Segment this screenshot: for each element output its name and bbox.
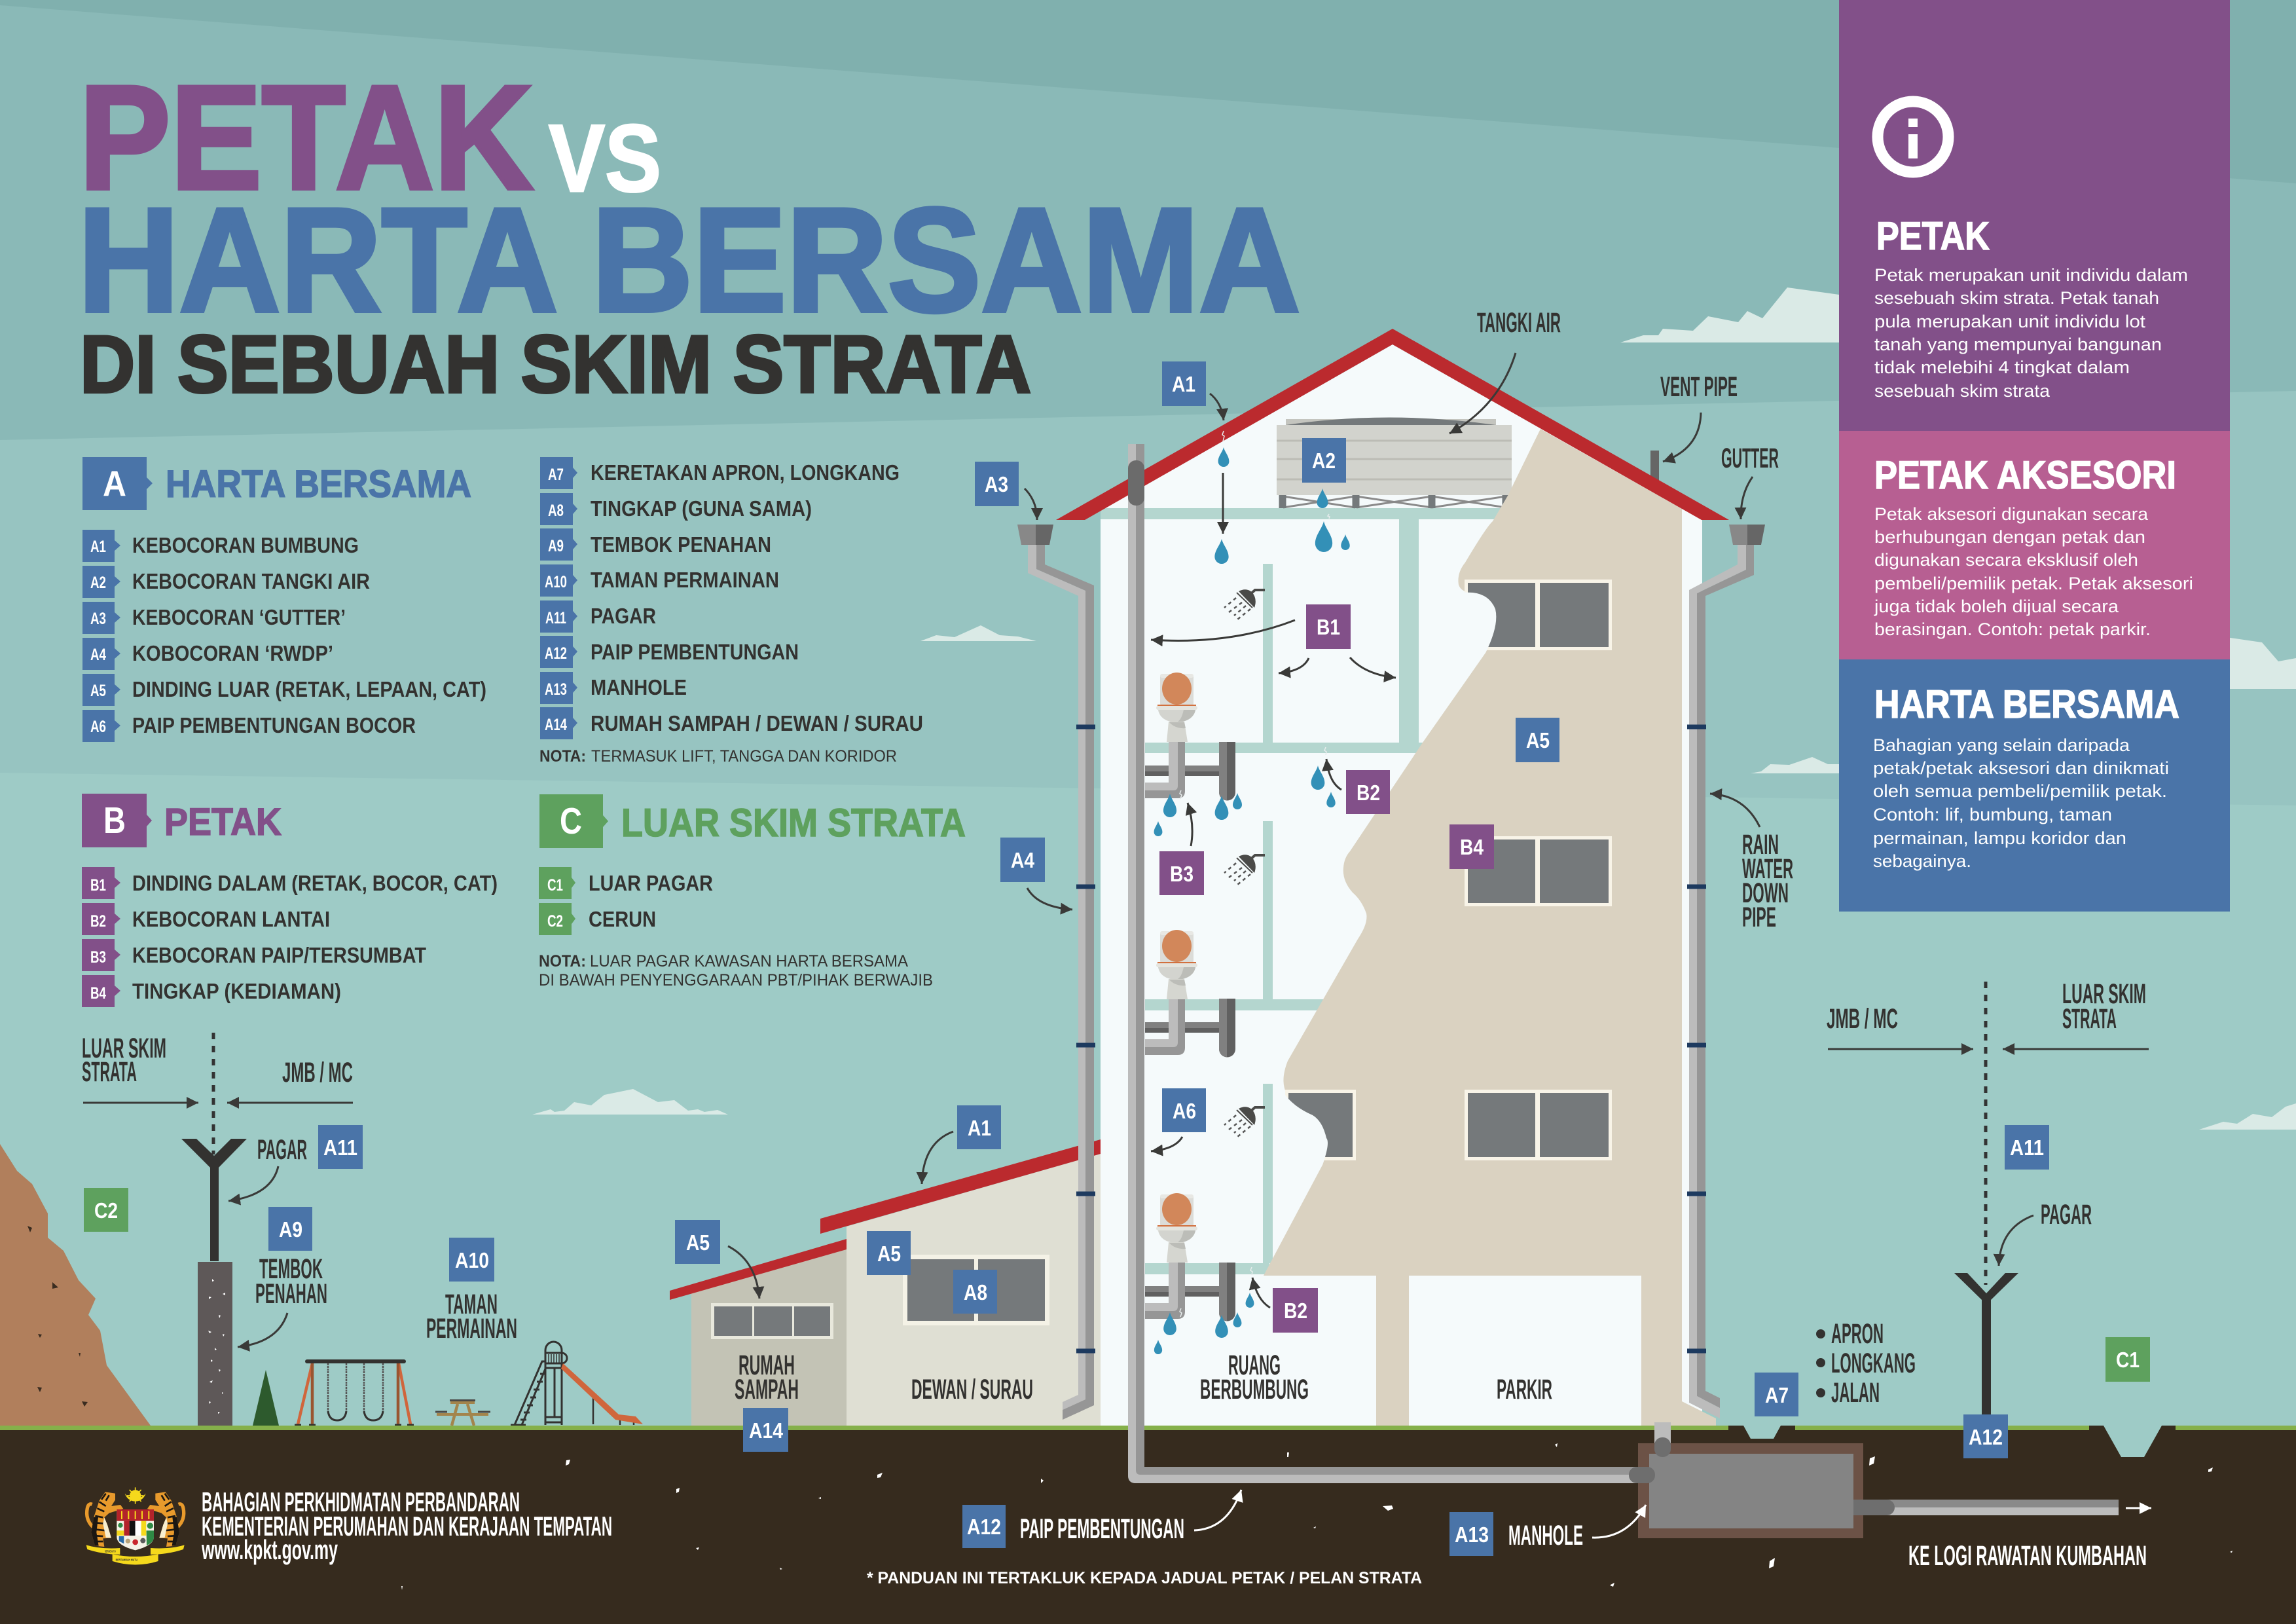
arrow: tembok penahan (238, 1313, 287, 1347)
note C: LUAR PAGAR KAWASAN HARTA BERSAMA (590, 952, 908, 970)
badge A3: A3 (985, 472, 1008, 496)
label: rain water down pipe (1742, 829, 1793, 933)
outlet pipe (1853, 1500, 2119, 1515)
list A7 to A14: PAGAR (591, 604, 656, 628)
list A7 to A14: A12 (545, 644, 567, 663)
badge B4: B4 (1460, 835, 1484, 859)
text: petak aksesori description (1874, 504, 2193, 639)
list A7 to A14: A8 (548, 502, 564, 520)
label: manhole: MANHOLE (1508, 1520, 1583, 1551)
windows (1283, 580, 1612, 1165)
list B1 to B4: B4 (90, 984, 106, 1003)
badge C2 (84, 1188, 128, 1232)
list: apron longkang jalan: APRON (1831, 1318, 1884, 1350)
label: luar skim strata right: LUAR SKIM (2062, 978, 2146, 1010)
list A1 to A6 (82, 530, 486, 742)
callout arrows (728, 353, 1760, 1538)
ministry crest (86, 1487, 185, 1564)
list B1 to B4 (82, 867, 498, 1007)
badge A5 dewan: A5 (877, 1242, 901, 1266)
ministry text: BAHAGIAN PERKHIDMATAN PERBANDARAN (202, 1486, 520, 1517)
manhole chamber (1629, 1422, 1863, 1538)
list A7 to A14: A13 (545, 680, 567, 699)
badge A5 facade: A5 (1526, 728, 1550, 752)
list A7 to A14: A14 (545, 716, 567, 734)
text: harta bersama description: permainan, lampu koridor dan (1873, 828, 2126, 848)
heading A: A (103, 463, 126, 504)
text: petak aksesori description: Petak aksesori digunakan secara (1874, 504, 2149, 524)
heading C (539, 794, 966, 848)
badge B1 (1306, 604, 1351, 649)
badge A11 left: A11 (323, 1135, 357, 1160)
list A7 to A14: A11 (545, 609, 566, 627)
legend B: petak (82, 794, 498, 1007)
label: jmb mc left: JMB / MC (282, 1057, 353, 1088)
ministry text (201, 1486, 612, 1565)
list A7 to A14: PAIP PEMBENTUNGAN (591, 640, 799, 664)
list A1 to A6: A2 (90, 574, 106, 592)
hill slope (0, 1144, 151, 1426)
floor slabs and partitions (1101, 508, 1520, 1274)
text: petak description: sesebuah skim strata. Petak tanah (1874, 288, 2159, 308)
text: harta bersama description: Bahagian yang selain daripada (1873, 735, 2130, 755)
list C1 and C2 (539, 867, 713, 935)
label: rain water down pipe: RAIN (1742, 829, 1779, 860)
list C1 and C2: C1 (547, 876, 563, 895)
badge C2: C2 (94, 1198, 118, 1223)
list A1 to A6: A4 (90, 646, 106, 664)
badge A14 (743, 1408, 788, 1452)
text: petak description: sesebuah skim strata (1874, 381, 2050, 401)
list: apron longkang jalan (1816, 1318, 1916, 1409)
panel: petak (1839, 0, 2230, 431)
crest shield (117, 1509, 154, 1550)
clouds (532, 287, 2296, 1130)
roof (1056, 329, 1729, 520)
label: jmb mc right: JMB / MC (1827, 1003, 1898, 1035)
list B1 to B4: B3 (90, 948, 106, 967)
badge B1: B1 (1317, 615, 1340, 639)
arrow: pagar left (228, 1166, 278, 1201)
panel: harta bersama: HARTA BERSAMA (1874, 682, 2179, 726)
picnic table (435, 1399, 490, 1426)
text: petak aksesori description: berhubungan dengan petak dan (1874, 527, 2145, 547)
label: luar skim strata right (2062, 978, 2146, 1035)
badge A2: A2 (1312, 449, 1336, 473)
heading B: B (103, 800, 126, 841)
label: tembok penahan (255, 1253, 327, 1310)
list C1 and C2: C2 (547, 912, 563, 931)
badge A7 (1755, 1373, 1798, 1416)
heading B (82, 794, 282, 847)
shower heads (1224, 589, 1265, 1137)
underground (0, 1426, 2296, 1624)
text: petak description (1874, 265, 2188, 401)
callout labels (1020, 307, 1793, 1551)
water tank (1277, 418, 1512, 508)
text: petak aksesori description: juga tidak boleh dijual secara (1874, 597, 2119, 616)
label: pagar right: PAGAR (2041, 1199, 2092, 1230)
list C1 and C2: CERUN (589, 907, 656, 931)
panel: petak aksesori (1839, 431, 2230, 659)
crest moon and star (125, 1487, 146, 1504)
icon: info (1878, 101, 1948, 172)
note C: DI BAWAH PENYENGGARAAN PBT/PIHAK BERWAJIB (539, 971, 933, 989)
right rainwater downpipe (1687, 525, 1765, 1418)
list A7 to A14 (540, 457, 923, 739)
text: PAGAR (257, 1134, 307, 1166)
list A7 to A14: A10 (545, 573, 567, 591)
list C1 and C2: LUAR PAGAR (589, 871, 713, 895)
label: rain water down pipe: WATER (1742, 853, 1793, 885)
legend C: luar skim strata (539, 794, 966, 989)
list B1 to B4: B1 (90, 876, 106, 895)
list A7 to A14: MANHOLE (591, 675, 687, 699)
list A7 to A14: TINGKAP (GUNA SAMA) (591, 496, 812, 521)
label: luar skim strata left: STRATA (82, 1056, 137, 1088)
badge A11 left (318, 1125, 363, 1169)
badge B2 lower (1273, 1288, 1318, 1333)
legend A: harta bersama (82, 457, 923, 766)
rumah sampah building (670, 1239, 847, 1426)
list A7 to A14: TEMBOK PENAHAN (591, 532, 771, 557)
badge A1 roof: A1 (1172, 372, 1195, 396)
text: petak aksesori description: berasingan. Contoh: petak parkir. (1874, 619, 2151, 639)
badge A11 right (2005, 1125, 2049, 1170)
list A1 to A6: KOBOCORAN ‘RWDP’ (132, 641, 333, 665)
badge A14: A14 (749, 1418, 784, 1443)
badge A6: A6 (1173, 1099, 1196, 1123)
badge A12 bottom (962, 1505, 1006, 1548)
water drops (1154, 431, 1350, 1354)
badge A10 (449, 1238, 494, 1282)
list A1 to A6: A3 (90, 610, 106, 628)
right fence (1954, 982, 2018, 1414)
note C (539, 952, 933, 989)
label: taman permainan: PERMAINAN (426, 1313, 517, 1344)
badge A7: A7 (1765, 1383, 1789, 1407)
badge B2 upper: B2 (1357, 781, 1380, 805)
panel: petak aksesori: PETAK AKSESORI (1874, 453, 2176, 497)
panel: definitions (1839, 0, 2230, 912)
badge A12 bottom: A12 (967, 1515, 1001, 1539)
badge A13: A13 (1455, 1522, 1489, 1547)
diagram badges (675, 361, 2150, 1556)
label: luar skim strata right: STRATA (2062, 1003, 2117, 1035)
tree (253, 1370, 279, 1426)
badge B2 lower: B2 (1284, 1299, 1307, 1323)
badge C1: C1 (2116, 1348, 2140, 1372)
text: harta bersama description: Contoh: lif, bumbung, taman (1873, 805, 2112, 824)
vent pipe (1650, 451, 1659, 483)
badge B4 (1449, 824, 1494, 869)
label: tembok penahan: TEMBOK (259, 1253, 323, 1285)
heading A (82, 457, 471, 510)
label: ruang berbumbung (1200, 1350, 1309, 1405)
crest motto ribbon (86, 1545, 185, 1564)
label: dewan surau: DEWAN / SURAU (911, 1374, 1033, 1405)
badge A12 right: A12 (1969, 1425, 2003, 1449)
ministry text: KEMENTERIAN PERUMAHAN DAN KERAJAAN TEMPATAN (202, 1511, 612, 1541)
badge A4 (1000, 838, 1045, 882)
crest motto ribbon: BERSEKUTU (105, 1550, 116, 1553)
text: harta bersama description (1873, 735, 2169, 871)
label: parkir: PARKIR (1497, 1374, 1552, 1405)
arrow: pagar right (1999, 1215, 2033, 1266)
ministry text: www.kpkt.gov.my (201, 1534, 338, 1565)
label: paip pembentungan: PAIP PEMBENTUNGAN (1020, 1513, 1184, 1545)
label: luar skim strata left (82, 1033, 166, 1088)
crest tigers (87, 1492, 184, 1547)
toilet pipes floors (1145, 742, 1235, 1321)
label: taman permainan (426, 1289, 517, 1344)
list: apron longkang jalan: LONGKANG (1831, 1348, 1916, 1379)
crest motto ribbon: BERTAMBAH MUTU (116, 1558, 137, 1561)
badge A5 rumah sampah (675, 1220, 720, 1264)
slide (511, 1342, 643, 1425)
label: ruang berbumbung: BERBUMBUNG (1200, 1374, 1309, 1405)
label: rumah sampah: SAMPAH (735, 1374, 799, 1405)
badge C1 (2105, 1337, 2150, 1382)
text: petak description: tanah yang mempunyai bangunan (1874, 335, 2162, 354)
panel: petak: PETAK (1876, 214, 1990, 258)
label: vent pipe: VENT PIPE (1660, 371, 1738, 403)
list: apron longkang jalan: JALAN (1831, 1377, 1880, 1409)
list A1 to A6: KEBOCORAN TANGKI AIR (132, 569, 370, 593)
text: petak description: pula merupakan unit individu lot (1874, 312, 2146, 331)
label: ruang berbumbung: RUANG (1228, 1350, 1281, 1381)
footnote: * PANDUAN INI TERTAKLUK KEPADA JADUAL PETAK / PELAN STRATA (867, 1569, 1422, 1587)
label: tembok penahan: PENAHAN (255, 1278, 327, 1310)
badge A9: A9 (279, 1217, 302, 1242)
badge A8 (953, 1270, 997, 1314)
list A1 to A6: A6 (90, 718, 106, 736)
list A1 to A6: KEBOCORAN BUMBUNG (132, 533, 359, 557)
dewan surau building (820, 1139, 1101, 1426)
list A1 to A6: A5 (90, 682, 106, 700)
badge B2 upper (1346, 770, 1390, 814)
list A7 to A14: KERETAKAN APRON, LONGKANG (591, 460, 900, 485)
arrow: to sewage plant (2126, 1507, 2151, 1509)
badge A5 rumah sampah: A5 (686, 1230, 710, 1255)
badge A5 dewan (867, 1231, 911, 1275)
building interior (1101, 344, 1702, 1426)
label: rumah sampah: RUMAH (738, 1350, 795, 1381)
label: rain water down pipe: PIPE (1742, 902, 1776, 933)
badge A1 dewan: A1 (968, 1116, 991, 1140)
list A7 to A14: A7 (548, 466, 564, 484)
badge A11 right: A11 (2010, 1135, 2044, 1160)
note C: NOTA: (539, 952, 586, 970)
text: petak description: Petak merupakan unit individu dalam (1874, 265, 2188, 285)
label: luar skim strata left: LUAR SKIM (82, 1033, 166, 1064)
label: taman permainan: TAMAN (445, 1289, 498, 1320)
main building (1056, 329, 1729, 1426)
badge A9 (268, 1207, 312, 1251)
badge A4: A4 (1011, 848, 1035, 872)
label: rain water down pipe: DOWN (1742, 877, 1789, 909)
badge A13 (1449, 1512, 1493, 1556)
text: harta bersama description: petak/petak aksesori dan dinikmati (1873, 758, 2169, 778)
arrows: boundary left (83, 1101, 353, 1104)
arrows: boundary right (1828, 1048, 2149, 1050)
text: harta bersama description: sebagainya. (1873, 851, 1971, 871)
label: rumah sampah (735, 1350, 799, 1405)
badge A1 dewan (957, 1105, 1001, 1149)
note A: NOTA: (539, 747, 586, 766)
title (78, 54, 1300, 410)
sewer pipe (1128, 444, 1648, 1483)
heading A: HARTA BERSAMA (166, 463, 471, 506)
list B1 to B4: KEBOCORAN LANTAI (132, 907, 330, 931)
list B1 to B4: KEBOCORAN PAIP/TERSUMBAT (132, 943, 426, 967)
list A1 to A6: DINDING LUAR (RETAK, LEPAAN, CAT) (132, 677, 486, 701)
text: petak description: tidak melebihi 4 tingkat dalam (1874, 358, 2130, 377)
list B1 to B4: B2 (90, 912, 106, 931)
swing set (295, 1359, 414, 1425)
heading B: PETAK (164, 801, 282, 843)
beige facade (1264, 429, 1716, 1426)
badge A8: A8 (964, 1280, 987, 1304)
left rainwater downpipe (1017, 525, 1095, 1420)
note A: TERMASUK LIFT, TANGGA DAN KORIDOR (591, 747, 897, 766)
badge A12 right (1963, 1414, 2008, 1458)
callout labels: GUTTER (1721, 443, 1779, 474)
badge A6 (1162, 1088, 1206, 1132)
label: tangki air: TANGKI AIR (1477, 307, 1561, 339)
badge A2 (1302, 438, 1346, 483)
list B1 to B4: TINGKAP (KEDIAMAN) (132, 979, 341, 1003)
list A1 to A6: PAIP PEMBENTUNGAN BOCOR (132, 713, 416, 737)
title: HARTA BERSAMA (78, 177, 1300, 342)
heading C: C (560, 800, 582, 842)
panel: harta bersama (1839, 659, 2230, 912)
badge B3 (1159, 851, 1204, 895)
badge A3 (975, 462, 1019, 506)
text: harta bersama description: oleh semua pembeli/pemilik petak. (1873, 781, 2167, 801)
list B1 to B4: DINDING DALAM (RETAK, BOCOR, CAT) (132, 871, 498, 895)
list A1 to A6: KEBOCORAN ‘GUTTER’ (132, 605, 346, 629)
text: petak aksesori description: digunakan secara eksklusif oleh (1874, 550, 2138, 570)
list A7 to A14: TAMAN PERMAINAN (591, 568, 779, 592)
list A7 to A14: A9 (548, 537, 564, 555)
title: DI SEBUAH SKIM STRATA (80, 320, 1031, 410)
badge A10: A10 (455, 1248, 489, 1272)
list A1 to A6: A1 (90, 538, 106, 556)
toilets (1156, 673, 1197, 1263)
heading C: LUAR SKIM STRATA (621, 801, 966, 845)
list A7 to A14: RUMAH SAMPAH / DEWAN / SURAU (591, 711, 923, 735)
badge A1 roof (1162, 361, 1206, 406)
text: petak aksesori description: pembeli/pemilik petak. Petak aksesori (1874, 574, 2193, 593)
badge B3: B3 (1170, 862, 1194, 886)
title: PETAK (79, 54, 533, 220)
badge A5 facade (1516, 718, 1559, 762)
fence and retaining wall (181, 1033, 247, 1426)
title: VS (549, 105, 661, 212)
